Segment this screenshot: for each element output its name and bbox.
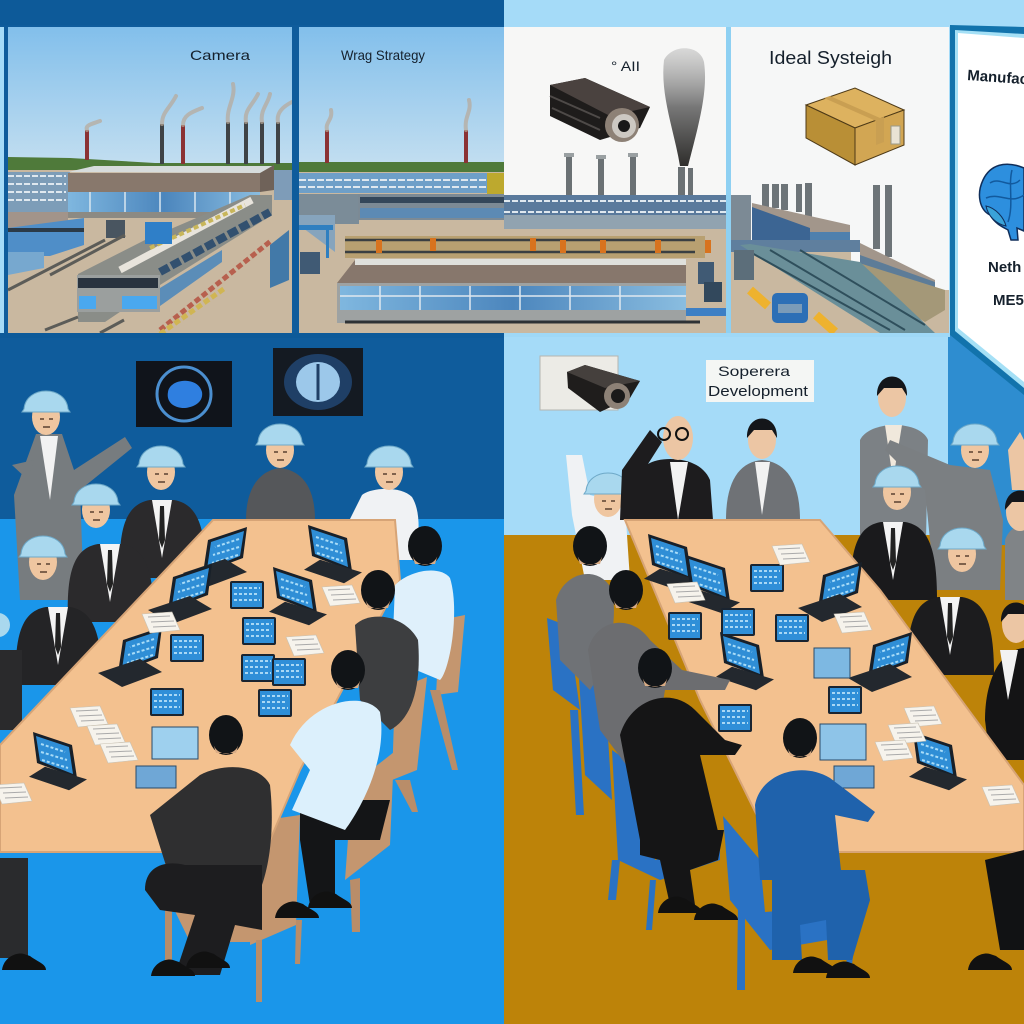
left chairs bbox=[165, 615, 465, 1002]
label: AI: ° AII bbox=[611, 58, 640, 74]
icon: brain bbox=[979, 164, 1024, 240]
seated engineers bbox=[120, 446, 206, 578]
label: Camera: Camera bbox=[190, 47, 250, 63]
label: Wrag Strategy: Wrag Strategy bbox=[341, 47, 425, 63]
stacks bbox=[566, 155, 693, 207]
divider strips bbox=[0, 27, 950, 338]
panel: whiteboard bbox=[950, 25, 1024, 395]
main building bbox=[337, 260, 686, 283]
panel: factory left bbox=[8, 27, 292, 334]
icon: cardboard box bbox=[806, 88, 904, 165]
monitor: brain scan right bbox=[273, 348, 363, 416]
label: ME5: ME5 bbox=[993, 292, 1024, 309]
monitor: brain scan left bbox=[136, 361, 232, 427]
left table bbox=[0, 520, 400, 852]
standing engineer bbox=[12, 391, 132, 600]
blue vehicle bbox=[772, 293, 808, 323]
people front of right table bbox=[556, 526, 1024, 978]
right table bbox=[625, 520, 1024, 852]
panel: factory centre bbox=[299, 27, 504, 333]
chimneys bbox=[85, 125, 185, 164]
icon: security camera bbox=[550, 78, 650, 142]
smoke plume bbox=[663, 48, 705, 166]
sign: Soperera Development: Development bbox=[708, 383, 809, 400]
label: Ideal Systeigh: Ideal Systeigh bbox=[769, 48, 892, 68]
panel: factory ideal bbox=[731, 27, 949, 333]
conveyor bbox=[78, 195, 272, 322]
devices on left table bbox=[0, 525, 362, 804]
people behind left table bbox=[0, 391, 419, 730]
panel: factory AI bbox=[337, 27, 726, 333]
camera icon on wall bbox=[540, 356, 640, 412]
people behind right table bbox=[566, 376, 1024, 760]
label: Neth: Neth bbox=[988, 259, 1021, 276]
sign: Soperera Development bbox=[706, 360, 814, 402]
right chairs bbox=[547, 618, 856, 990]
sign: Soperera Development: Soperera bbox=[718, 363, 790, 379]
devices on right table bbox=[644, 534, 1020, 806]
people front of left table bbox=[0, 526, 454, 976]
